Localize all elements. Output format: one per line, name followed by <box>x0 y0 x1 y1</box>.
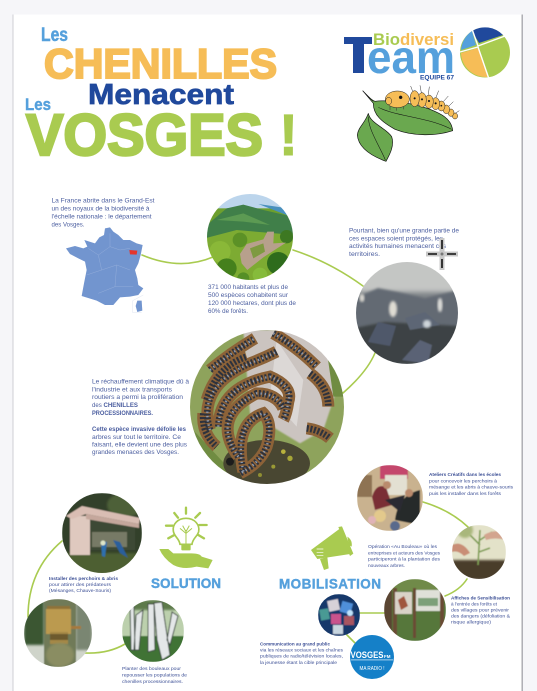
text: human activities: ces espaces soient protégés, les <box>349 236 443 242</box>
connector lines <box>28 250 468 653</box>
Vosges department <box>129 250 137 255</box>
photo: information panels <box>384 579 446 641</box>
text: perches caption: (Mésanges, Chauve-Souris) <box>49 588 111 593</box>
photo: processionary caterpillars <box>188 330 347 487</box>
text: birch caption: chenilles processionnaires. <box>122 679 183 684</box>
text: workshops: Ateliers Créatifs dans les écoles <box>429 472 501 477</box>
icon: lightbulb in hand <box>159 508 213 568</box>
badge: Vosges FM: MA RADIO ! <box>360 666 384 672</box>
lower leaf <box>357 113 393 161</box>
title: Menacent <box>88 79 234 111</box>
text: public communication: la jeunesse étant la cible principale <box>260 660 337 665</box>
text: perches caption <box>49 576 118 593</box>
text: caterpillar explanation: routiers a permi la prolifération <box>92 395 183 401</box>
icon: caterpillar on leaf <box>357 85 459 161</box>
badge: Vosges FM <box>350 635 394 679</box>
title: Les <box>25 95 51 114</box>
text: perches caption: pour attirer des prédateurs <box>49 582 112 587</box>
text: France intro: des Vosges. <box>52 222 85 228</box>
text: France intro: l'échelle nationale : le département <box>52 214 152 220</box>
text: awareness posters: des dangers (défoliation & <box>451 614 510 618</box>
title: CHENILLES <box>44 40 277 87</box>
text: public communication: publiques de radio/télévision locales, <box>260 654 343 658</box>
text: mountain caption: 60% de forêts. <box>208 309 248 315</box>
text: human activities: territoires. <box>349 252 380 258</box>
text: caterpillar explanation: PROCESSIONNAIRES. <box>92 411 153 417</box>
text: human activities <box>349 228 460 258</box>
text: public communication: via les réseaux sociaux et les chaînes <box>260 648 344 652</box>
map of France <box>66 227 143 313</box>
text: mountain caption <box>208 285 297 315</box>
text: Au Bouleau operation: participeront à la plantation des <box>368 556 441 562</box>
text: caterpillar explanation: des CHENILLES <box>92 403 138 409</box>
bulb <box>166 508 207 550</box>
heading: solution: SOLUTION <box>151 576 221 591</box>
text: caterpillar explanation <box>92 380 190 456</box>
photo: bat box <box>24 599 92 667</box>
upper leaf <box>363 91 453 135</box>
text: human activities: Pourtant, bien qu'une grande partie de <box>349 228 460 234</box>
text: workshops: puis les installer dans les forêts <box>429 491 502 496</box>
photo: tree planting <box>452 522 506 580</box>
logo wordmark: EQUIPE 67 <box>420 74 454 82</box>
text: public communication: Communication au grand public <box>260 642 330 646</box>
title: VOSGES <box>26 103 263 168</box>
text: caterpillar explanation: l'industrie et aux transports <box>92 388 172 394</box>
text: mountain caption: 500 espèces cohabitent sur <box>208 293 288 299</box>
photo: polluted village <box>355 258 459 364</box>
text: birch caption: repousser les populations de <box>122 672 187 678</box>
text: caterpillar explanation: faisant, elle devient une des plus <box>92 442 187 448</box>
logo pie <box>460 27 510 79</box>
text: caterpillar explanation: Cette espèce invasive défolie les <box>92 427 187 433</box>
title: Les <box>41 25 68 46</box>
logo wordmark: Biodiversi <box>373 31 454 49</box>
text: Au Bouleau operation: Opération «Au Bouleau» où les <box>368 544 438 549</box>
logo wordmark: eam <box>367 31 455 83</box>
text: public communication <box>260 642 344 665</box>
text: Au Bouleau operation <box>368 544 441 568</box>
text: awareness posters: Affiches de Sensibilisation <box>451 596 510 600</box>
text: caterpillar explanation: arbres sur tout le territoire. Ce <box>92 435 182 441</box>
badge: Vosges FM: FM <box>384 654 391 659</box>
heading: mobilisation: MOBILISATION <box>279 576 381 592</box>
photo: social media cubes <box>318 594 360 636</box>
text: awareness posters <box>451 596 510 624</box>
text: perches caption: Installer des perchoirs & abris <box>49 576 118 581</box>
text: birch caption: Planter des bouleaux pour <box>122 666 182 671</box>
logo letter T <box>344 37 372 73</box>
text: France intro: La France abrite dans le Grand-Est <box>52 198 155 204</box>
text: birch caption <box>122 666 187 684</box>
photo: workshop <box>357 465 423 531</box>
text: workshops: mésange et les abris à chauve-souris <box>429 484 514 490</box>
text: workshops: pour concevoir les perchoirs à <box>429 478 497 484</box>
text: caterpillar explanation: Le réchauffement climatique dû à <box>92 380 190 386</box>
text: France intro <box>52 198 155 228</box>
text: awareness posters: à l'entrée des forêts et <box>451 602 498 606</box>
cursor crosshair <box>426 238 458 270</box>
icon: megaphone <box>311 526 353 570</box>
title: ! <box>279 103 298 168</box>
text: mountain caption: 371 000 habitants et plus de <box>208 285 289 291</box>
badge: Vosges FM: VOSGES <box>350 650 384 661</box>
text: awareness posters: des villages pour prévenir <box>451 608 510 612</box>
logo: BiodiversiTeam Equipe 67 <box>344 27 510 83</box>
text: human activities: activités humaines menacent ces <box>349 244 446 250</box>
text: caterpillar explanation: grandes menaces des Vosges. <box>92 450 179 456</box>
photo: birch trees <box>122 600 184 662</box>
photo: mountain and castle <box>205 193 295 284</box>
caterpillar body <box>385 85 459 119</box>
text: mountain caption: 120 000 hectares, dont plus de <box>208 301 297 307</box>
title <box>25 25 298 168</box>
text: France intro: un des noyaux de la biodiversité à <box>52 206 150 212</box>
text: awareness posters: risque allergique) <box>451 620 492 624</box>
text: Au Bouleau operation: entreprises et acteurs des Vosges <box>368 550 441 556</box>
text: workshops <box>429 472 514 496</box>
photo: bird feeder <box>62 493 143 575</box>
hand <box>159 549 213 568</box>
text: Au Bouleau operation: nouveaux arbres. <box>368 563 405 568</box>
